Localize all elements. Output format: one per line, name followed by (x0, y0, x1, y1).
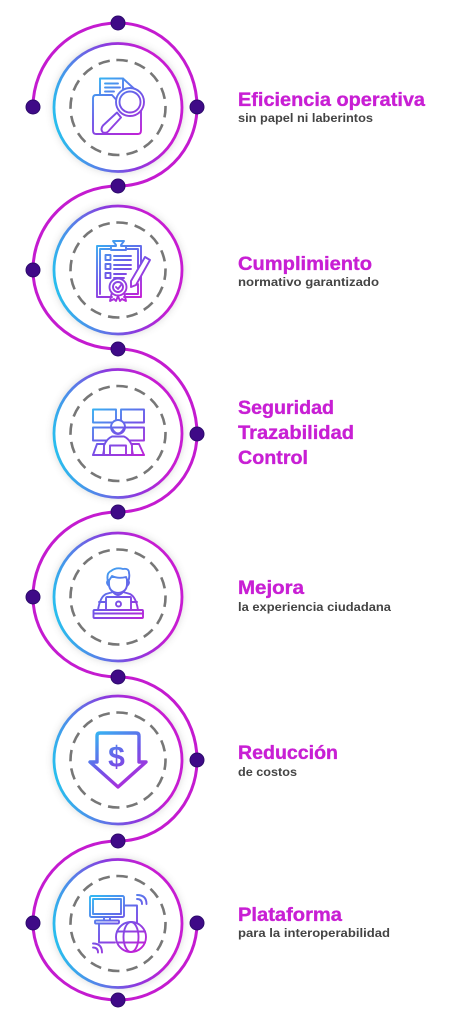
ring (54, 533, 182, 661)
text: eficiencia operativa: Eficiencia operativa (238, 89, 425, 111)
panel: cumplimiento (54, 206, 182, 334)
ring (54, 44, 182, 172)
icon: folder and magnifier (93, 78, 144, 134)
text: eficiencia operativa (238, 89, 425, 125)
panel: reduccion (54, 696, 182, 824)
panel: mejora (54, 533, 182, 661)
text: seguridad trazabilidad control: Control (238, 447, 308, 469)
text: eficiencia operativa: sin papel ni laberintos (238, 111, 373, 125)
text: reduccion (238, 742, 338, 779)
connecting path (33, 23, 197, 1000)
text: cumplimiento: normativo garantizado (238, 275, 379, 289)
text: seguridad trazabilidad control: Seguridad (238, 397, 334, 419)
icon: operator and monitors (93, 410, 144, 455)
ring (54, 370, 182, 498)
text: reduccion: Reducción (238, 742, 338, 764)
text: mejora: la experiencia ciudadana (238, 600, 391, 614)
text: cumplimiento (238, 253, 379, 289)
text: cumplimiento: Cumplimiento (238, 253, 372, 275)
path nodes (26, 16, 204, 1007)
text: seguridad trazabilidad control: Trazabilidad (238, 422, 354, 444)
icon: computer and globe (90, 895, 146, 952)
icon: person with laptop (94, 568, 143, 618)
ring (54, 696, 182, 824)
ring (54, 206, 182, 334)
panel: eficiencia operativa (54, 44, 182, 172)
text: mejora: Mejora (238, 577, 304, 599)
text: plataforma: para la interoperabilidad (238, 926, 390, 940)
text: plataforma (238, 904, 390, 940)
icon: down arrow with dollar: $ (108, 741, 125, 774)
icon: clipboard with seal and pencil (97, 241, 150, 301)
text: reduccion: de costos (238, 765, 297, 779)
ring (54, 860, 182, 988)
text: seguridad trazabilidad control (238, 397, 354, 469)
panel: plataforma (54, 860, 182, 988)
text: mejora (238, 577, 391, 614)
panel: seguridad (54, 370, 182, 498)
text: plataforma: Plataforma (238, 904, 342, 926)
